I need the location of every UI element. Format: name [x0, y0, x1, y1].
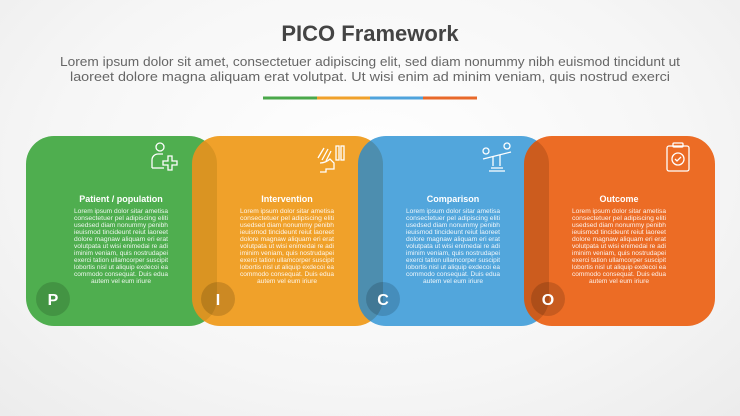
body text: intervention: autem vel eum iriure — [257, 278, 318, 285]
body text: comparison — [406, 208, 501, 285]
body text: intervention: exerci tation ullamcorper suscipit — [240, 257, 334, 264]
letter I — [201, 282, 235, 316]
body text: patient: ieuismod tincideunt reiut laoreet — [74, 229, 168, 236]
body text: comparison: autem vel eum iriure — [423, 278, 484, 285]
body text: patient: autem vel eum iriure — [91, 278, 152, 285]
body text: outcome: Lorem ipsum dolor sitar ametisa — [572, 208, 667, 215]
card: patient — [26, 136, 217, 326]
letter P — [36, 282, 70, 316]
body text: outcome: consectetuer pel adipiscing eliti — [572, 215, 666, 222]
letter C: C — [377, 292, 389, 309]
body text: outcome — [572, 208, 667, 285]
body text: intervention: lobortis nisl ut aliquip exdecoi ea — [240, 264, 335, 271]
card: intervention — [192, 136, 383, 326]
body text: outcome: autem vel eum iriure — [589, 278, 650, 285]
body text: patient — [74, 208, 169, 285]
card: outcome — [524, 136, 715, 326]
heading: Intervention — [261, 194, 313, 204]
body text: outcome: commodo consequat. Duis edua — [572, 271, 667, 278]
body text: intervention: usedsed diam nonummy penibh — [240, 222, 335, 229]
body text: comparison: volutpata ut wisi enimedai re adi — [406, 243, 500, 250]
body text: outcome: iminim veniam, quis nostrudapei — [572, 250, 666, 257]
body text: outcome: usedsed diam nonummy penibh — [572, 222, 667, 229]
body text: patient: commodo consequat. Duis edua — [74, 271, 169, 278]
letter O: O — [542, 292, 554, 309]
title: PICO Framework — [281, 21, 459, 46]
body text: outcome: lobortis nisl ut aliquip exdecoi ea — [572, 264, 667, 271]
body text: intervention: Lorem ipsum dolor sitar ametisa — [240, 208, 335, 215]
body text: comparison: exerci tation ullamcorper suscipit — [406, 257, 500, 264]
letter O — [531, 282, 565, 316]
letter P: P — [48, 292, 59, 309]
body text: comparison: commodo consequat. Duis edua — [406, 271, 501, 278]
subtitle: Lorem ipsum dolor sit amet, consectetuer adipiscing elit, sed diam nonummy nibh euismod tincidunt ut — [60, 54, 680, 69]
icon: seesaw — [483, 143, 511, 171]
body text: intervention — [240, 208, 335, 285]
body text: intervention: iminim veniam, quis nostrudapei — [240, 250, 334, 257]
body text: patient: iminim veniam, quis nostrudapei — [74, 250, 168, 257]
icon: person plus — [152, 143, 177, 170]
body text: patient: consectetuer pel adipiscing eliti — [74, 215, 168, 222]
body text: intervention: consectetuer pel adipiscing eliti — [240, 215, 334, 222]
heading: Patient / population — [79, 194, 163, 204]
body text: comparison: iminim veniam, quis nostrudapei — [406, 250, 500, 257]
letter C — [366, 282, 400, 316]
body text: comparison: ieuismod tincideunt reiut laoreet — [406, 229, 500, 236]
icon: hand — [318, 146, 344, 172]
body text: comparison: dolore magnaw aliquam eri erat — [406, 236, 500, 243]
body text: intervention: ieuismod tincideunt reiut laoreet — [240, 229, 334, 236]
body text: patient: lobortis nisl ut aliquip exdecoi ea — [74, 264, 169, 271]
body text: outcome: exerci tation ullamcorper suscipit — [572, 257, 666, 264]
body text: comparison: lobortis nisl ut aliquip exdecoi ea — [406, 264, 501, 271]
cards — [26, 136, 715, 326]
body text: outcome: volutpata ut wisi enimedai re adi — [572, 243, 666, 250]
body text: comparison: consectetuer pel adipiscing eliti — [406, 215, 500, 222]
heading: Comparison — [427, 194, 479, 204]
body text: patient: dolore magnaw aliquam eri erat — [74, 236, 168, 243]
card: comparison — [358, 136, 549, 326]
body text: intervention: dolore magnaw aliquam eri erat — [240, 236, 334, 243]
body text: outcome: ieuismod tincideunt reiut laoreet — [572, 229, 666, 236]
body text: patient: volutpata ut wisi enimedai re adi — [74, 243, 168, 250]
letter I: I — [216, 292, 220, 309]
body text: patient: exerci tation ullamcorper suscipit — [74, 257, 168, 264]
heading: Outcome — [599, 194, 639, 204]
subtitle — [60, 54, 680, 84]
body text: patient: usedsed diam nonummy penibh — [74, 222, 169, 229]
body text: comparison: usedsed diam nonummy penibh — [406, 222, 501, 229]
subtitle: laoreet dolore magna aliquam erat volutpat. Ut wisi enim ad minim veniam, quis nostrud exerci — [70, 69, 670, 84]
color divider — [263, 96, 477, 100]
body text: intervention: commodo consequat. Duis edua — [240, 271, 335, 278]
body text: patient: Lorem ipsum dolor sitar ametisa — [74, 208, 169, 215]
icon: clipboard check — [667, 143, 689, 171]
body text: outcome: dolore magnaw aliquam eri erat — [572, 236, 666, 243]
body text: comparison: Lorem ipsum dolor sitar ametisa — [406, 208, 501, 215]
body text: intervention: volutpata ut wisi enimedai re adi — [240, 243, 334, 250]
